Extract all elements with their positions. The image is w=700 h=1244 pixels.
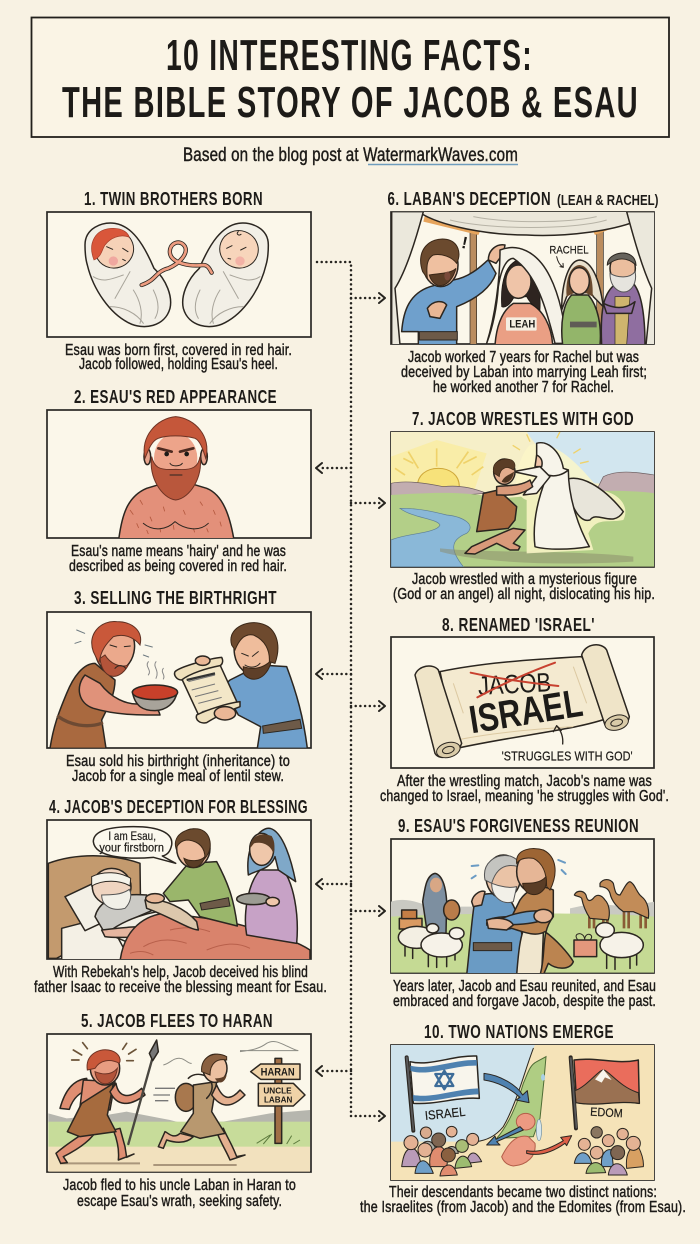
caption 3 [66,753,290,785]
panel: fact 4 jacob's deception [34,796,327,996]
heading 10: 10. TWO NATIONS EMERGE [424,1021,614,1042]
caption 5: escape Esau's wrath, seeking safety. [77,1193,282,1210]
caption 1 [65,342,292,373]
illustration: esau trades for stew [50,621,307,748]
illustration: swaddled twins with cord [85,223,268,327]
caption 4: father Isaac to receive the blessing meant for Esau. [34,979,327,996]
panel: fact 2 esau's red appearance [47,386,311,575]
sign: haran: HARAN [261,1067,295,1079]
frame 10 [391,1045,654,1180]
frame 6 [391,212,654,344]
large camel [600,880,649,928]
label: leah: LEAH [509,318,535,330]
heading 2: 2. ESAU'S RED APPEARANCE [74,386,277,407]
caption 7: Jacob wrestled with a mysterious figure [412,571,637,588]
caption 9 [393,978,656,1010]
edom label: EDOM [590,1105,623,1120]
caption 10 [360,1184,686,1216]
meaning label: 'STRUGGLES WITH GOD' [502,750,633,764]
illustration: esau chases fleeing jacob [48,1040,310,1172]
sign: uncle laban: LABAN [264,1094,292,1104]
frame 5 [47,1034,311,1172]
caption 6: deceived by Laban into marrying Leah first; [401,364,647,381]
panel: fact 10 two nations emerge [360,1021,686,1216]
caption 2 [69,543,287,575]
caption 6: he worked another 7 for Rachel. [433,379,614,396]
caption 1: Jacob followed, holding Esau's heel. [79,356,278,373]
speech bubble: your firstborn [99,841,164,855]
panel: fact 3 selling the birthright [47,587,311,785]
sign: haran [251,1064,300,1079]
illustration: leah unveiled: ! [460,233,469,253]
speech bubble: I am Esau, [108,829,156,843]
caption 6 [401,349,647,396]
panel: fact 9 forgiveness reunion [391,815,656,1010]
panel: fact 6 laban's deception [388,188,659,396]
heading 6: 6. LABAN'S DECEPTION [388,188,551,209]
frame 4 [47,820,311,959]
frame 3 [47,612,311,748]
illustration: brothers embrace [391,849,654,975]
caption 5 [63,1177,296,1210]
sign: uncle laban [258,1083,305,1106]
caption 2: described as being covered in red hair. [69,558,287,575]
speech bubble [93,827,176,863]
sign: uncle laban: UNCLE [263,1085,292,1095]
heading 6: (LEAH & RACHEL) [557,193,659,209]
caption 1: Esau was born first, covered in red hair. [65,342,292,359]
edom flag [570,1057,639,1128]
title box [32,18,669,137]
israel flag [406,1056,479,1131]
heading 1: 1. TWIN BROTHERS BORN [84,188,263,209]
crossed out jacob: JACOB [477,667,552,701]
heading 3: 3. SELLING THE BIRTHRIGHT [74,587,277,608]
crowd: israelites [402,1126,482,1176]
illustration: hairy red esau [119,417,234,540]
illustration: scroll with new name [415,645,633,764]
subtitle: Based on the blog post at WatermarkWaves.com [183,145,518,166]
caption 3: Esau sold his birthright (inheritance) to [66,753,290,770]
panel: fact 7 jacob wrestles with god [391,408,655,603]
label: rachel: RACHEL [549,244,589,256]
caption 3: Jacob for a single meal of lentil stew. [72,768,284,785]
illustration: leah unveiled [390,210,655,345]
caption 4 [34,964,327,996]
illustration: wrestling scene [391,432,654,567]
caption 4: With Rebekah's help, Jacob deceived his blind [53,964,308,981]
caption 8 [380,773,669,805]
illustration: blind isaac in bed [48,827,310,962]
panel: fact 1 twin brothers born [47,188,311,373]
frame 9 [391,839,654,973]
israel label: ISRAEL [424,1105,466,1123]
caption 7 [393,571,655,603]
new name: israel: ISRAEL [466,681,586,742]
panel: fact 8 renamed israel [380,614,669,805]
heading 5: 5. JACOB FLEES TO HARAN [81,1010,273,1031]
caption 5: Jacob fled to his uncle Laban in Haran to [63,1177,296,1194]
panel: fact 5 jacob flees [47,1010,311,1210]
frame 7 [391,432,654,567]
caption 2: Esau's name means 'hairy' and he was [71,543,286,560]
caption 6: Jacob worked 7 years for Rachel but was [408,349,639,366]
dotted connector flow [316,262,385,1121]
frame 1 [47,212,311,337]
frame 8 [391,637,654,768]
heading 8: 8. RENAMED 'ISRAEL' [442,614,595,635]
crowd: edomites [574,1127,643,1175]
illustration: map, flags and peoples [391,1045,654,1180]
heading 4: 4. JACOB'S DECEPTION FOR BLESSING [49,796,308,817]
small camel [574,891,609,928]
frame 2 [47,410,311,538]
